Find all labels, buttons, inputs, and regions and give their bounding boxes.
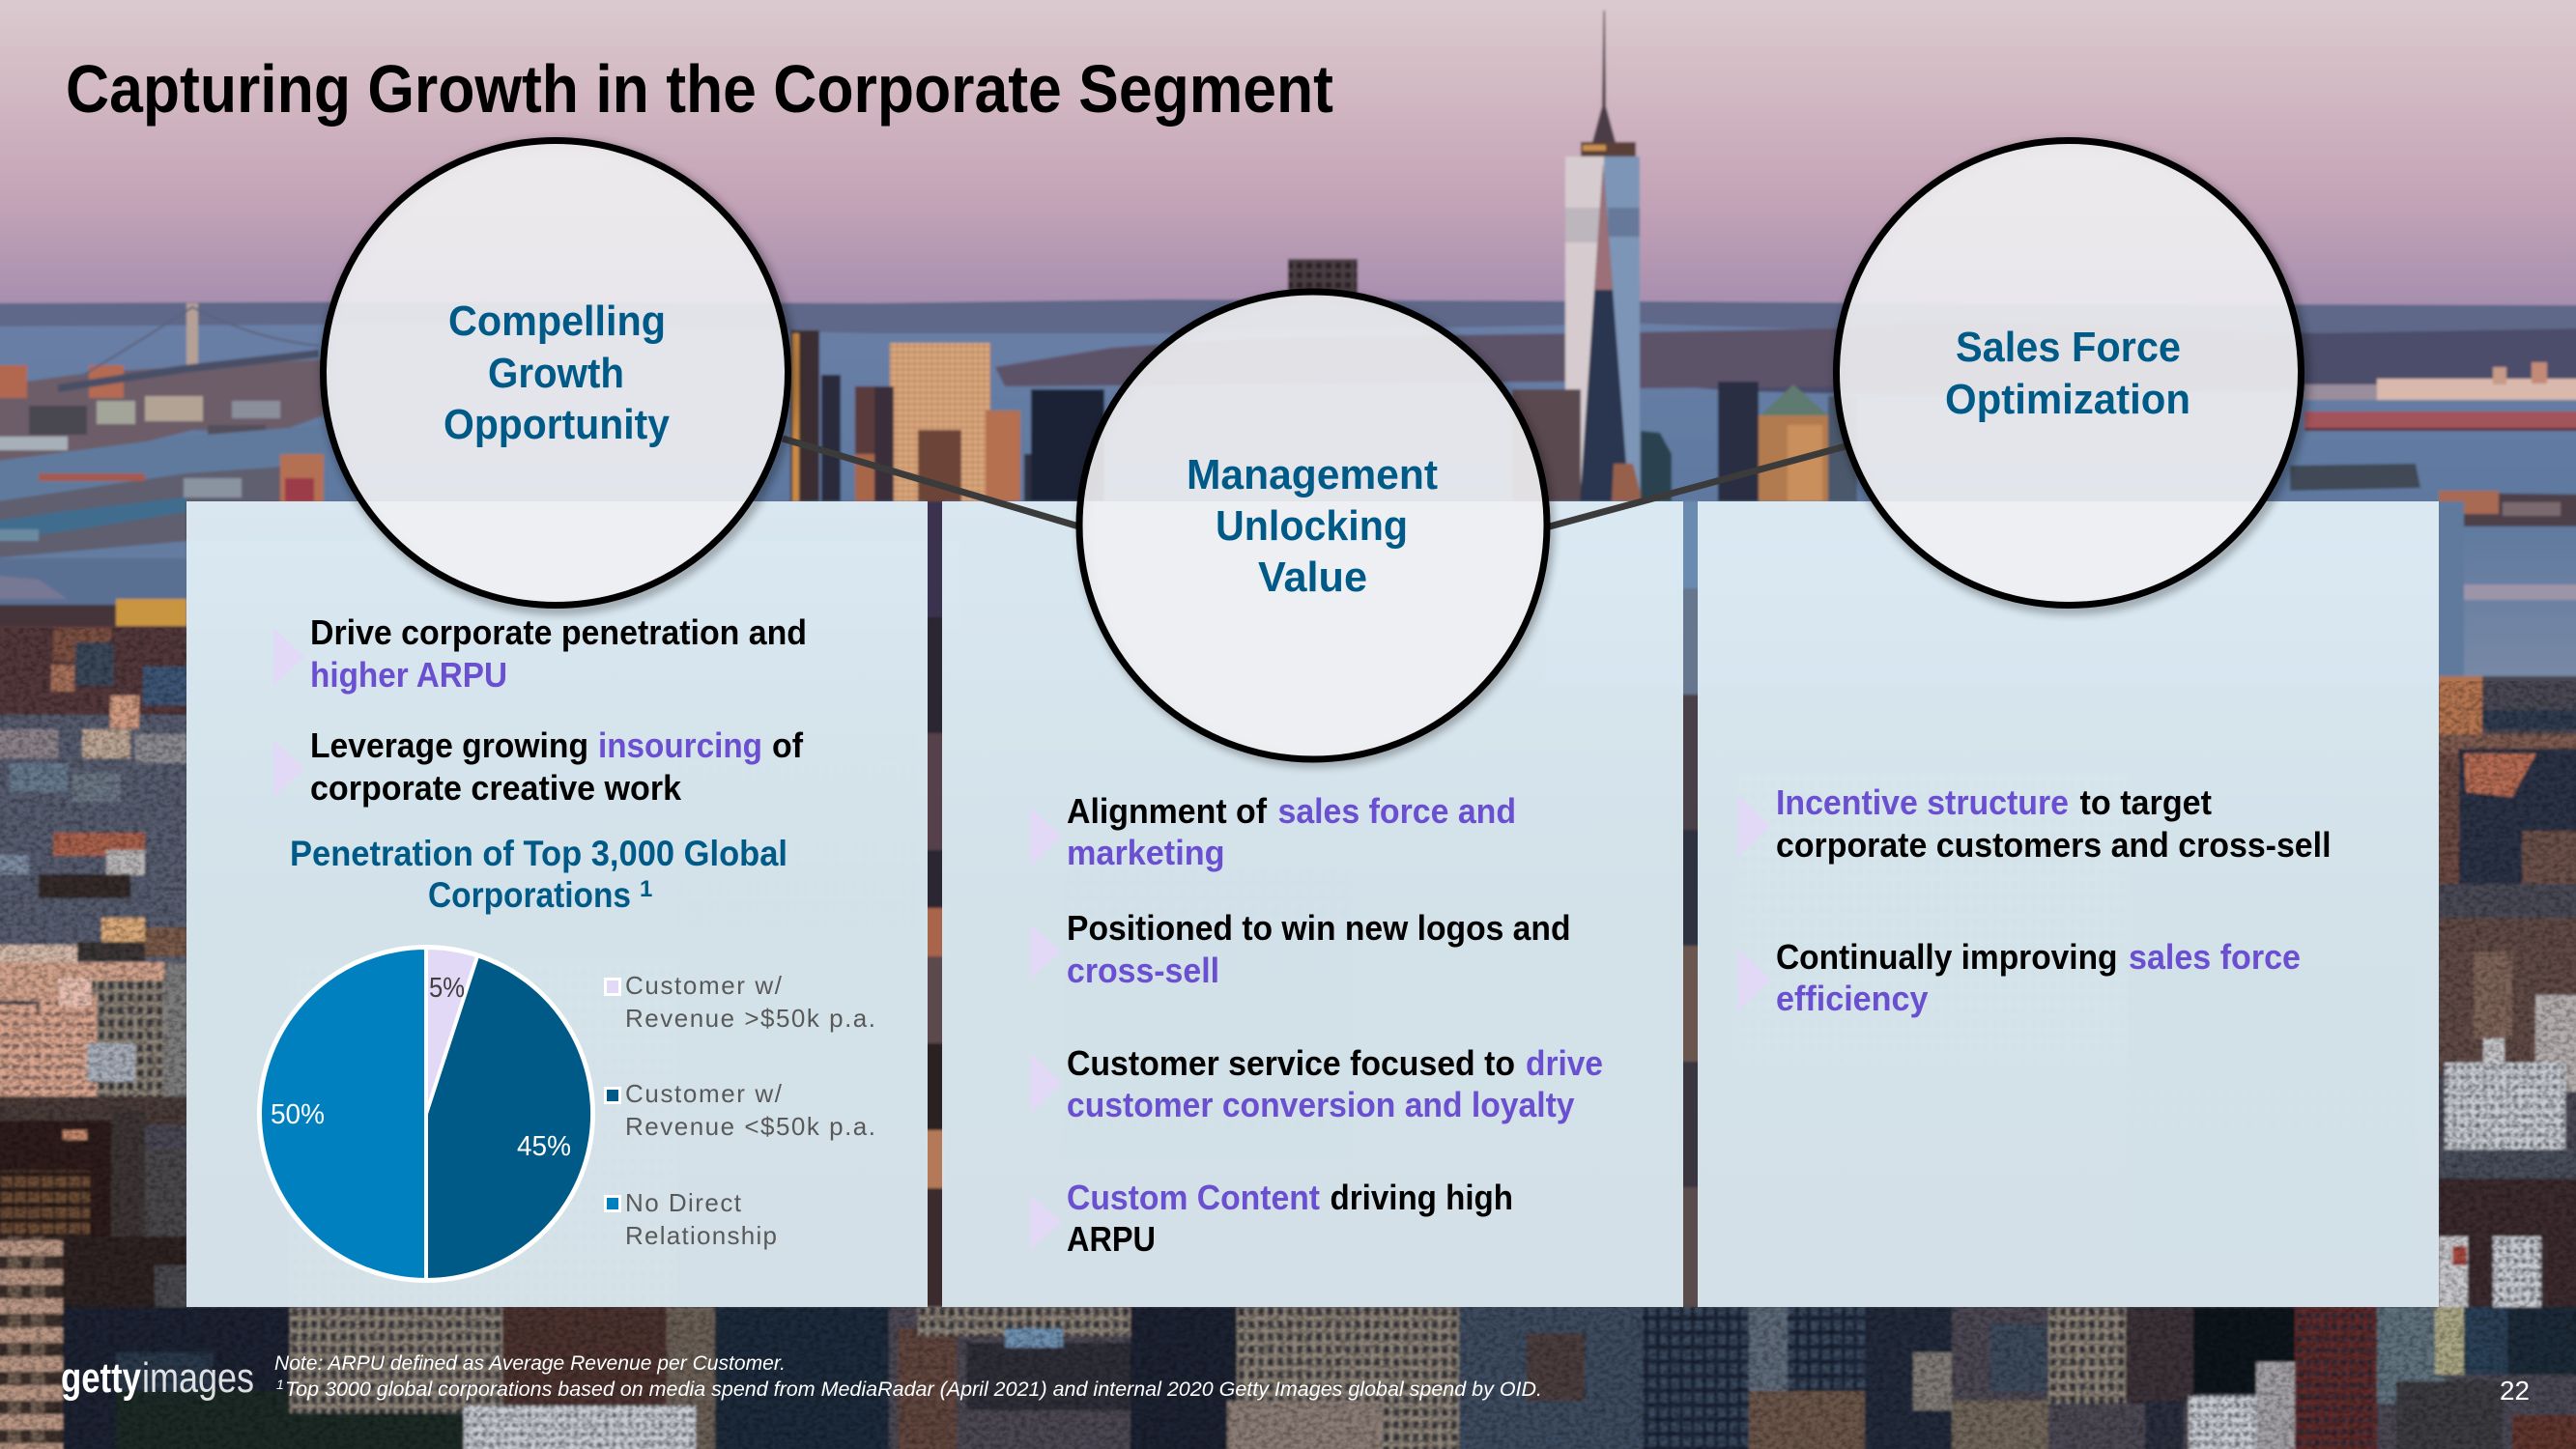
bullet: alignment of sales force: sales force and <box>1277 791 1516 831</box>
circle: management unlocking value <box>1079 292 1549 762</box>
bullet: continually improving <box>1738 937 2301 1018</box>
bullet: customer service: Customer service focused to <box>1067 1043 1515 1083</box>
midtown city mass <box>0 501 2576 1449</box>
pie chart: 45% <box>517 1131 571 1162</box>
bullet: alignment of sales force <box>1030 791 1516 872</box>
legend: No Direct <box>625 1188 742 1217</box>
panel: management unlocking value <box>942 501 1683 1307</box>
bullet: positioned to win new logos <box>1030 908 1571 990</box>
circle heading: Value <box>1258 554 1367 601</box>
circle heading: Compelling <box>448 298 666 345</box>
circle: sales force optimization <box>1836 141 2304 610</box>
chart heading: Corporations <box>428 875 631 915</box>
city texture: bottom band shadows <box>186 1307 2439 1449</box>
legend: Relationship <box>625 1221 777 1250</box>
circle heading: Management <box>1187 451 1438 498</box>
circle heading <box>1945 324 2190 423</box>
logo: getty images: getty <box>61 1354 141 1402</box>
city texture: left margin shadows <box>0 628 186 1449</box>
bullet: custom content: Custom Content <box>1067 1178 1320 1217</box>
footnotes: 1 <box>276 1377 284 1392</box>
city texture: right margin shadows <box>2439 681 2576 1449</box>
bullet: alignment of sales force: Alignment of <box>1067 791 1268 831</box>
right margin neighbourhoods <box>2439 676 2576 1307</box>
bullet: continually improving: sales force <box>2129 937 2301 977</box>
circle heading: Unlocking <box>1216 502 1408 550</box>
new jersey shoreline strips <box>2290 362 2576 600</box>
pie chart: 50% <box>271 1099 325 1130</box>
bullet: drive corporate penetration <box>273 612 807 695</box>
chart heading: Penetration of Top 3,000 Global <box>290 834 787 873</box>
bullet: customer service <box>1030 1043 1603 1124</box>
bullet: leverage growing insourcing: Leverage growing <box>310 725 588 765</box>
circle heading <box>444 298 670 448</box>
bullet: incentive structure: corporate customers and cross-sell <box>1776 825 2331 865</box>
bullet: custom content: driving high <box>1330 1178 1513 1217</box>
legend: Customer w/ <box>625 971 783 1000</box>
bullet: custom content: ARPU <box>1067 1219 1156 1259</box>
circle heading: Sales Force <box>1956 324 2181 371</box>
far hills <box>0 299 2576 396</box>
downtown buildings left of tower <box>790 259 1580 501</box>
staten island and narrows bridge <box>0 303 324 605</box>
circle heading: Optimization <box>1945 376 2190 423</box>
bullet: incentive structure <box>1738 782 2331 865</box>
bullet: drive corporate penetration: higher ARPU <box>310 655 507 695</box>
bullet: leverage growing insourcing <box>273 725 804 808</box>
downtown buildings right of tower <box>1641 382 1857 501</box>
bullet: leverage growing insourcing: corporate creative work <box>310 768 682 808</box>
bullet: positioned to win new logos: cross-sell <box>1067 951 1219 990</box>
legend: Customer w/ <box>625 1079 783 1108</box>
bullet: continually improving: efficiency <box>1776 979 1929 1018</box>
bullet: positioned to win new logos: Positioned to win new logos and <box>1067 908 1571 948</box>
bullet: leverage growing insourcing: of <box>772 725 804 765</box>
gap columns between panels <box>926 501 1700 1307</box>
footnotes: Top 3000 global corporations based on media spend from MediaRadar (April 2021) and internal 2020 Getty Images global spend by OID. <box>285 1378 1542 1401</box>
logo: getty images: images <box>142 1354 254 1402</box>
pie chart: 5% <box>429 973 465 1004</box>
connector lines between circles <box>783 439 1846 527</box>
chart heading: 1 <box>640 876 652 902</box>
left margin neighbourhoods <box>0 599 186 1449</box>
panel: sales force optimization <box>1698 501 2439 1307</box>
legend <box>605 971 875 1250</box>
bullet: alignment of sales force: marketing <box>1067 833 1225 872</box>
circle: compelling growth opportunity <box>323 141 791 610</box>
bottom band of city blocks <box>63 1307 2576 1449</box>
bullet: leverage growing insourcing: insourcing <box>598 725 762 765</box>
logo: getty images <box>61 1354 254 1402</box>
sky <box>0 0 2576 319</box>
panel: compelling growth opportunity <box>186 501 928 1307</box>
title: Capturing Growth in the Corporate Segment <box>66 51 1333 127</box>
bullet: custom content <box>1030 1178 1513 1259</box>
pie chart <box>257 945 595 1283</box>
bullet: customer service: customer conversion and loyalty <box>1067 1085 1575 1124</box>
legend: Revenue <$50k p.a. <box>625 1112 875 1141</box>
chart heading <box>290 834 787 915</box>
bullet: continually improving: Continually improving <box>1776 937 2118 977</box>
circle heading <box>1187 451 1438 601</box>
bullet: incentive structure: to target <box>2079 782 2212 822</box>
footnotes <box>274 1352 1542 1401</box>
One World Trade Center <box>1565 11 1643 501</box>
footnotes: Note: ARPU defined as Average Revenue per Customer. <box>274 1352 786 1375</box>
bullet: incentive structure: Incentive structure <box>1776 782 2069 822</box>
harbour water <box>0 319 2576 724</box>
circle heading: Opportunity <box>444 401 670 448</box>
page number: 22 <box>2500 1376 2530 1406</box>
circle heading: Growth <box>488 350 624 397</box>
bullet: customer service: drive <box>1526 1043 1603 1083</box>
bullet: drive corporate penetration: Drive corporate penetration and <box>310 612 807 652</box>
legend: Revenue >$50k p.a. <box>625 1004 875 1033</box>
